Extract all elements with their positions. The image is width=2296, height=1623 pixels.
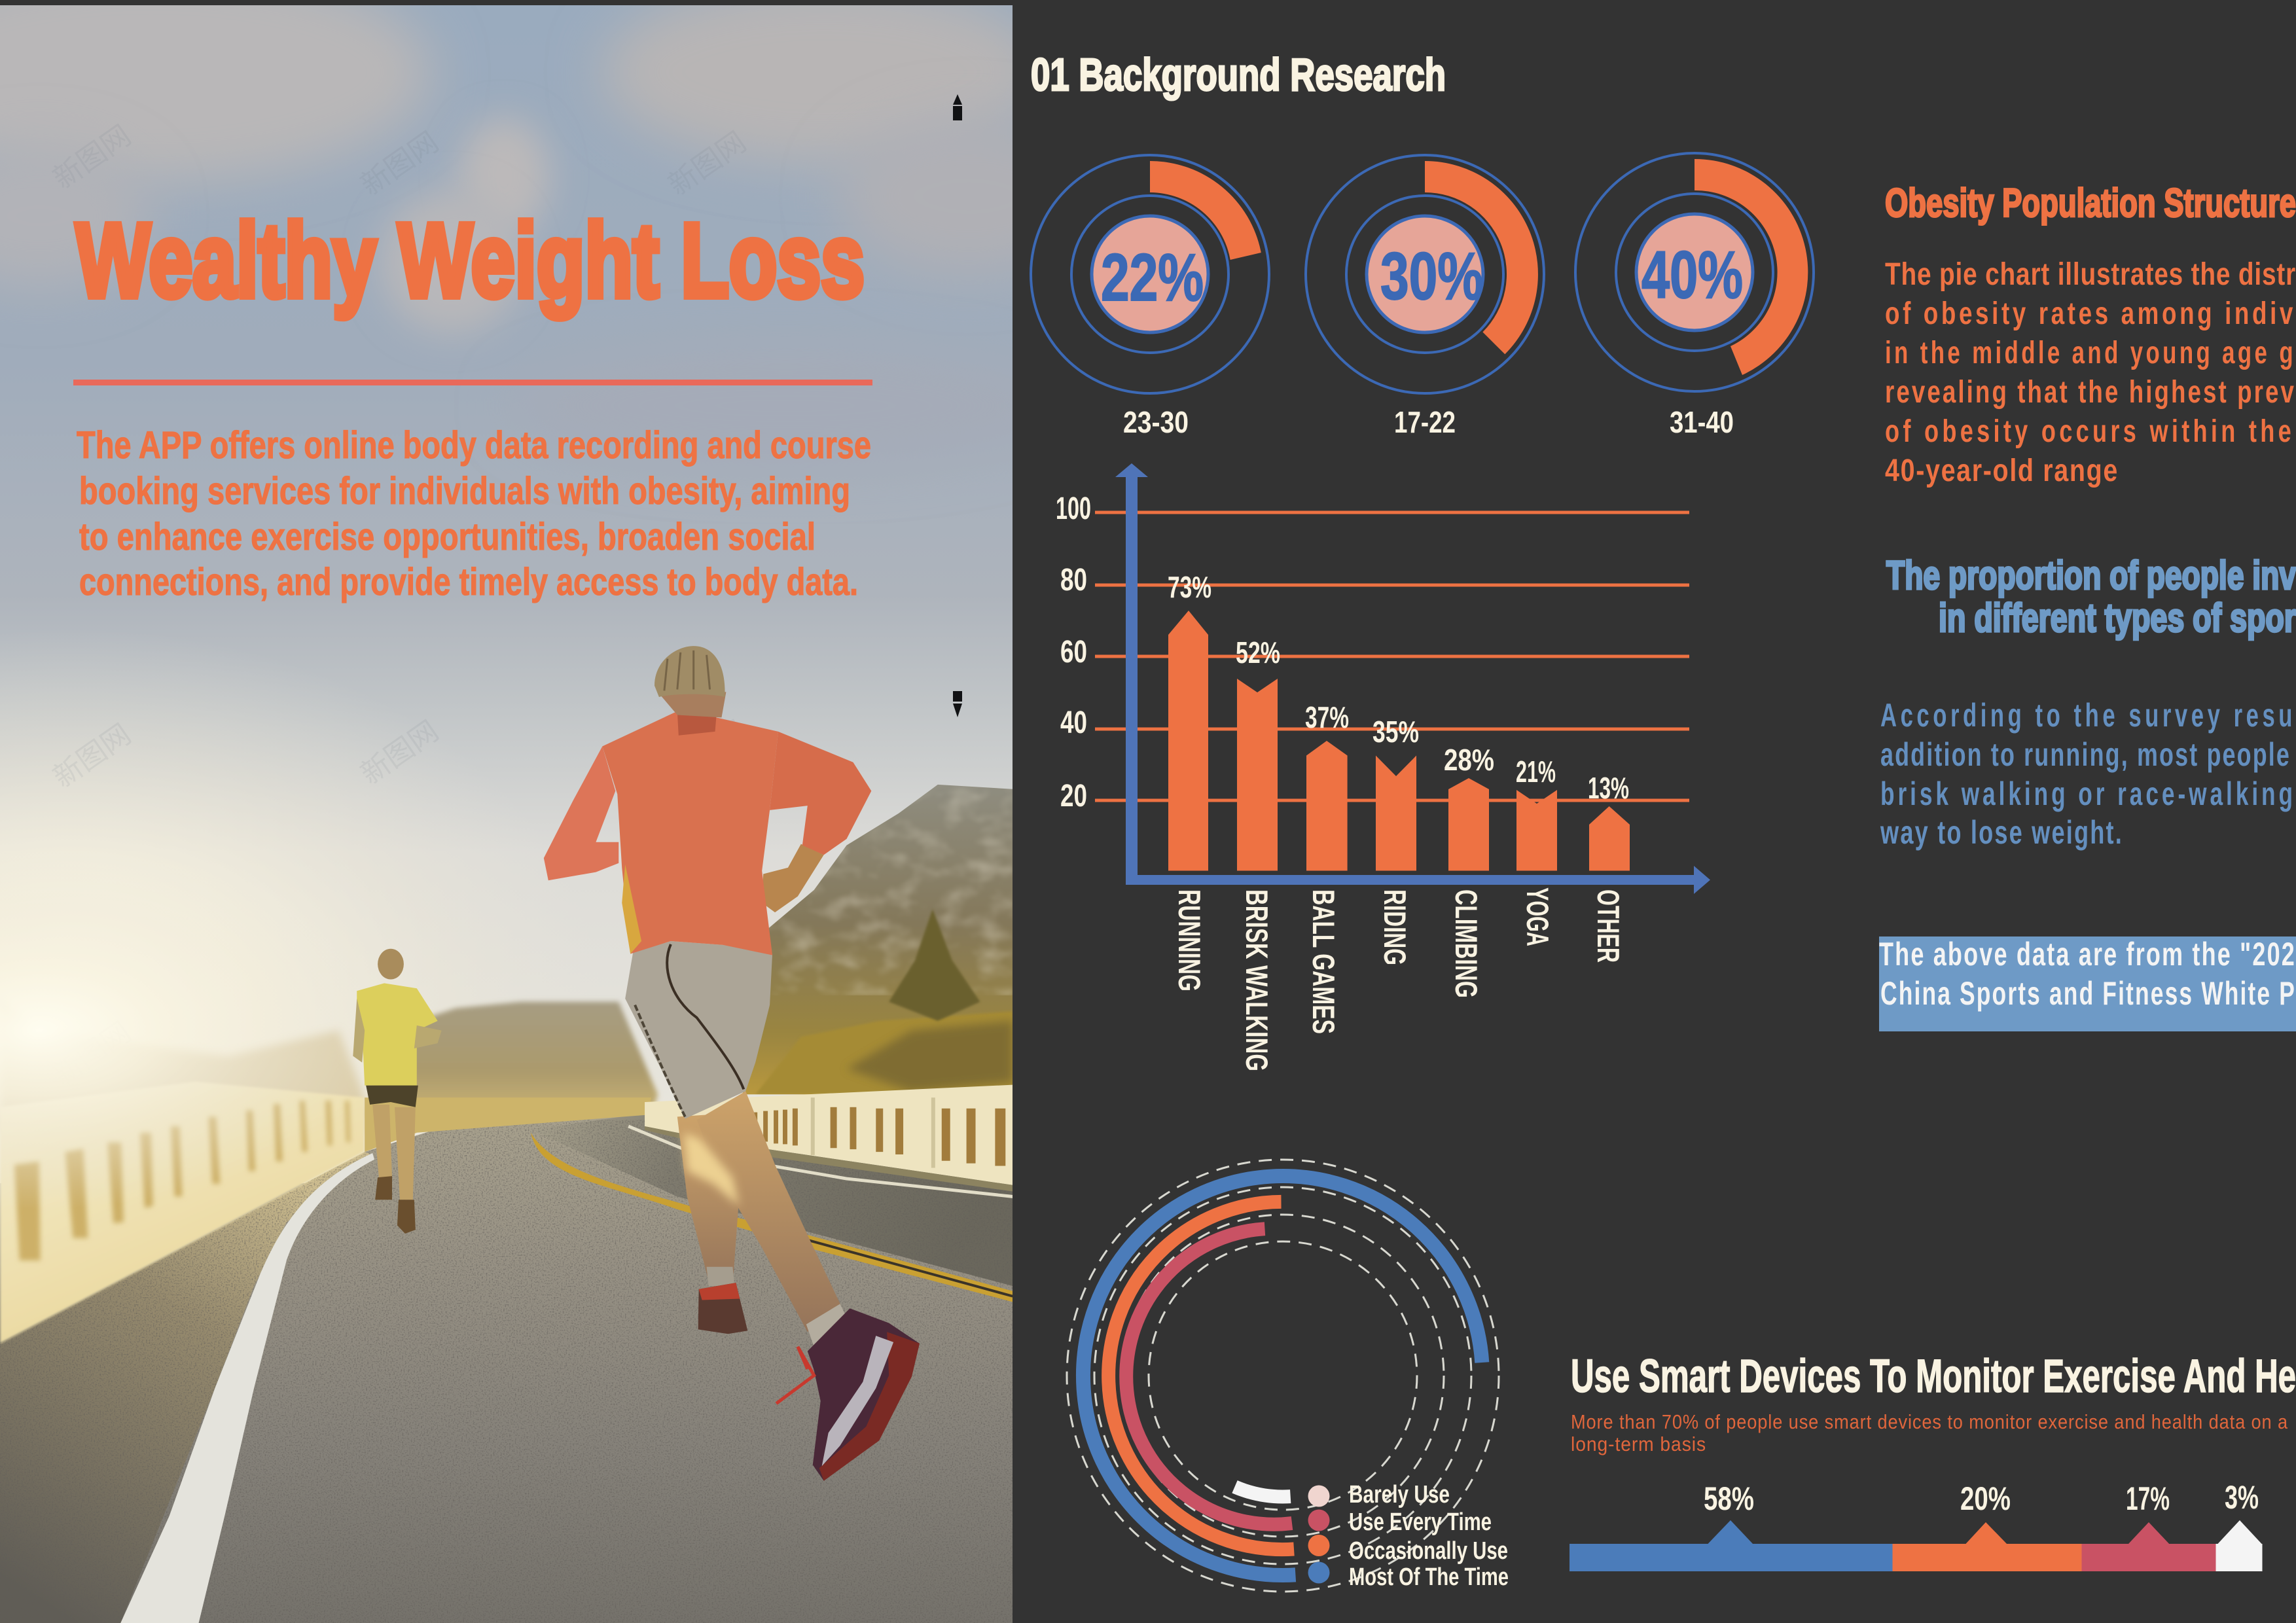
axis labels: 40 (1060, 705, 1087, 740)
axis labels: 60 (1060, 635, 1087, 669)
segment 58% (1570, 1480, 1893, 1571)
far lane (531, 1114, 1013, 1286)
dashed guide rings (1067, 1160, 1499, 1592)
watermarks: 新图网 (48, 718, 137, 794)
road grain (0, 1120, 1013, 1623)
leading leg (697, 1091, 842, 1332)
category labels: RUNNING (1172, 889, 1207, 991)
segment 20% (1893, 1480, 2081, 1571)
shirt arm right (770, 732, 871, 855)
left barrier (0, 1082, 651, 1344)
text block: pie chart explanation (1885, 257, 2296, 488)
road surface (0, 1111, 1013, 1623)
bars (1168, 611, 1630, 870)
callout: data source (1879, 936, 2296, 1031)
legend: device use frequency: Most Of The Time (1349, 1563, 1509, 1591)
watermarks: 新图网 (663, 715, 752, 791)
sunlight flare (0, 851, 378, 1209)
value labels: 37% (1305, 700, 1349, 734)
segment 17% (2081, 1480, 2216, 1571)
text block: survey results: way to lose weight. (1880, 814, 2123, 851)
shirt torso (602, 713, 778, 955)
donut chart: 31-40 40%: 31-40 (1670, 405, 1734, 439)
arc: occasionally use (1109, 1202, 1294, 1550)
donut chart: 31-40 40% (1575, 153, 1814, 439)
small runner in yellow (353, 949, 442, 1234)
scene: hills, road, barriers, runners (0, 646, 1013, 1623)
watermarks: 新图网 (663, 126, 752, 202)
legend: device use frequency: Occasionally Use (1349, 1537, 1508, 1565)
collar (677, 711, 716, 736)
value labels: 35% (1372, 715, 1419, 749)
arc: use every time (1126, 1229, 1292, 1524)
category labels: CLIMBING (1449, 889, 1484, 998)
title: Wealthy Weight Loss (76, 202, 865, 319)
forearm and hand (762, 844, 824, 912)
shirt arm left (544, 746, 619, 880)
axis labels: 20 (1060, 779, 1087, 813)
gridlines (1095, 510, 1689, 802)
value labels: 52% (1236, 635, 1280, 669)
category labels: YOGA (1520, 887, 1555, 946)
sky (0, 5, 1013, 1343)
watermarks: 新图网 (355, 715, 444, 791)
sock and shoe, front foot (806, 1304, 850, 1356)
donut chart: 23-30 22% (1031, 155, 1269, 439)
section heading: 01 Background Research (1031, 49, 1446, 100)
axes with arrows (1115, 463, 1710, 894)
intro text (77, 424, 871, 603)
small marker lower (953, 691, 962, 717)
segment 20%: 20% (1960, 1480, 2011, 1517)
panel: hero photo of runners (0, 0, 1100, 1623)
text block: survey results (1880, 697, 2296, 851)
axis labels: 100 (1056, 491, 1091, 526)
category labels: BALL GAMES (1306, 889, 1341, 1034)
watermarks: 新图网 (48, 119, 137, 195)
shorts (625, 941, 772, 1118)
watermarks: 新图网 (48, 1016, 137, 1092)
donut chart: 17-22 30%: 17-22 (1394, 405, 1456, 439)
value labels: 21% (1516, 755, 1556, 789)
watermarks: 新图网 (355, 126, 444, 202)
arc: most of the time (1083, 1176, 1482, 1575)
donut chart: 17-22 30%: 30% (1380, 239, 1483, 313)
text block: smart device usage (1571, 1410, 2288, 1455)
legend: device use frequency (1308, 1481, 1509, 1591)
neck and head (658, 692, 726, 717)
arc: barely use (1234, 1487, 1291, 1497)
legend: device use frequency: Use Every Time (1349, 1508, 1492, 1536)
legend: device use frequency: Barely Use (1349, 1481, 1450, 1508)
donut chart: 31-40 40%: 40% (1641, 238, 1743, 312)
title rule (73, 380, 872, 385)
category labels: BRISK WALKING (1240, 889, 1274, 1071)
category labels (1172, 887, 1626, 1071)
category labels: OTHER (1591, 889, 1626, 963)
segment 58%: 58% (1704, 1480, 1754, 1517)
white edge line (120, 1153, 374, 1623)
intro text: The APP offers online body data recording and course (77, 424, 871, 467)
intro text: connections, and provide timely access to body data. (79, 561, 858, 603)
mountain on the right (742, 785, 1013, 1094)
bar chart: sports participation (1056, 463, 1710, 1071)
right barrier (645, 1085, 1013, 1192)
back leg (677, 1114, 739, 1286)
text block: pie chart explanation: 40-year-old range (1885, 454, 2119, 488)
distant hazy hills left (1, 1028, 368, 1128)
hair (655, 646, 725, 697)
intro text: booking services for individuals with obesity, aiming (79, 470, 850, 512)
heading: proportion of people in sports (1886, 553, 2296, 640)
watermarks (48, 119, 752, 1092)
category labels: RIDING (1378, 889, 1412, 965)
yellow centre line (531, 1133, 1013, 1302)
axis labels: 80 (1060, 563, 1087, 597)
value labels: 13% (1588, 771, 1629, 805)
segment 3% (2216, 1479, 2262, 1571)
donut chart: 17-22 30% (1306, 155, 1544, 439)
far white line (628, 1126, 1013, 1196)
intro text: to enhance exercise opportunities, broaden social (79, 516, 816, 558)
large runner in orange (544, 646, 920, 1481)
distant hills behind small runner (365, 1002, 658, 1116)
radial chart: device use frequency (1067, 1160, 1499, 1592)
value labels: 73% (1168, 570, 1211, 604)
sock and shoe, back foot (707, 1267, 734, 1286)
segment 17%: 17% (2126, 1480, 2170, 1517)
left shoulder (0, 1152, 372, 1623)
small marker top (953, 94, 962, 120)
donut chart: 23-30 22%: 22% (1101, 240, 1204, 315)
segment 3%: 3% (2225, 1479, 2259, 1516)
stacked bar: smart device share (1570, 1479, 2262, 1571)
value labels (1168, 570, 1629, 805)
value labels: 28% (1444, 743, 1494, 777)
donut chart: 23-30 22%: 23-30 (1123, 405, 1189, 439)
axis labels (1056, 491, 1091, 813)
text block: smart device usage: long-term basis (1571, 1433, 1706, 1455)
